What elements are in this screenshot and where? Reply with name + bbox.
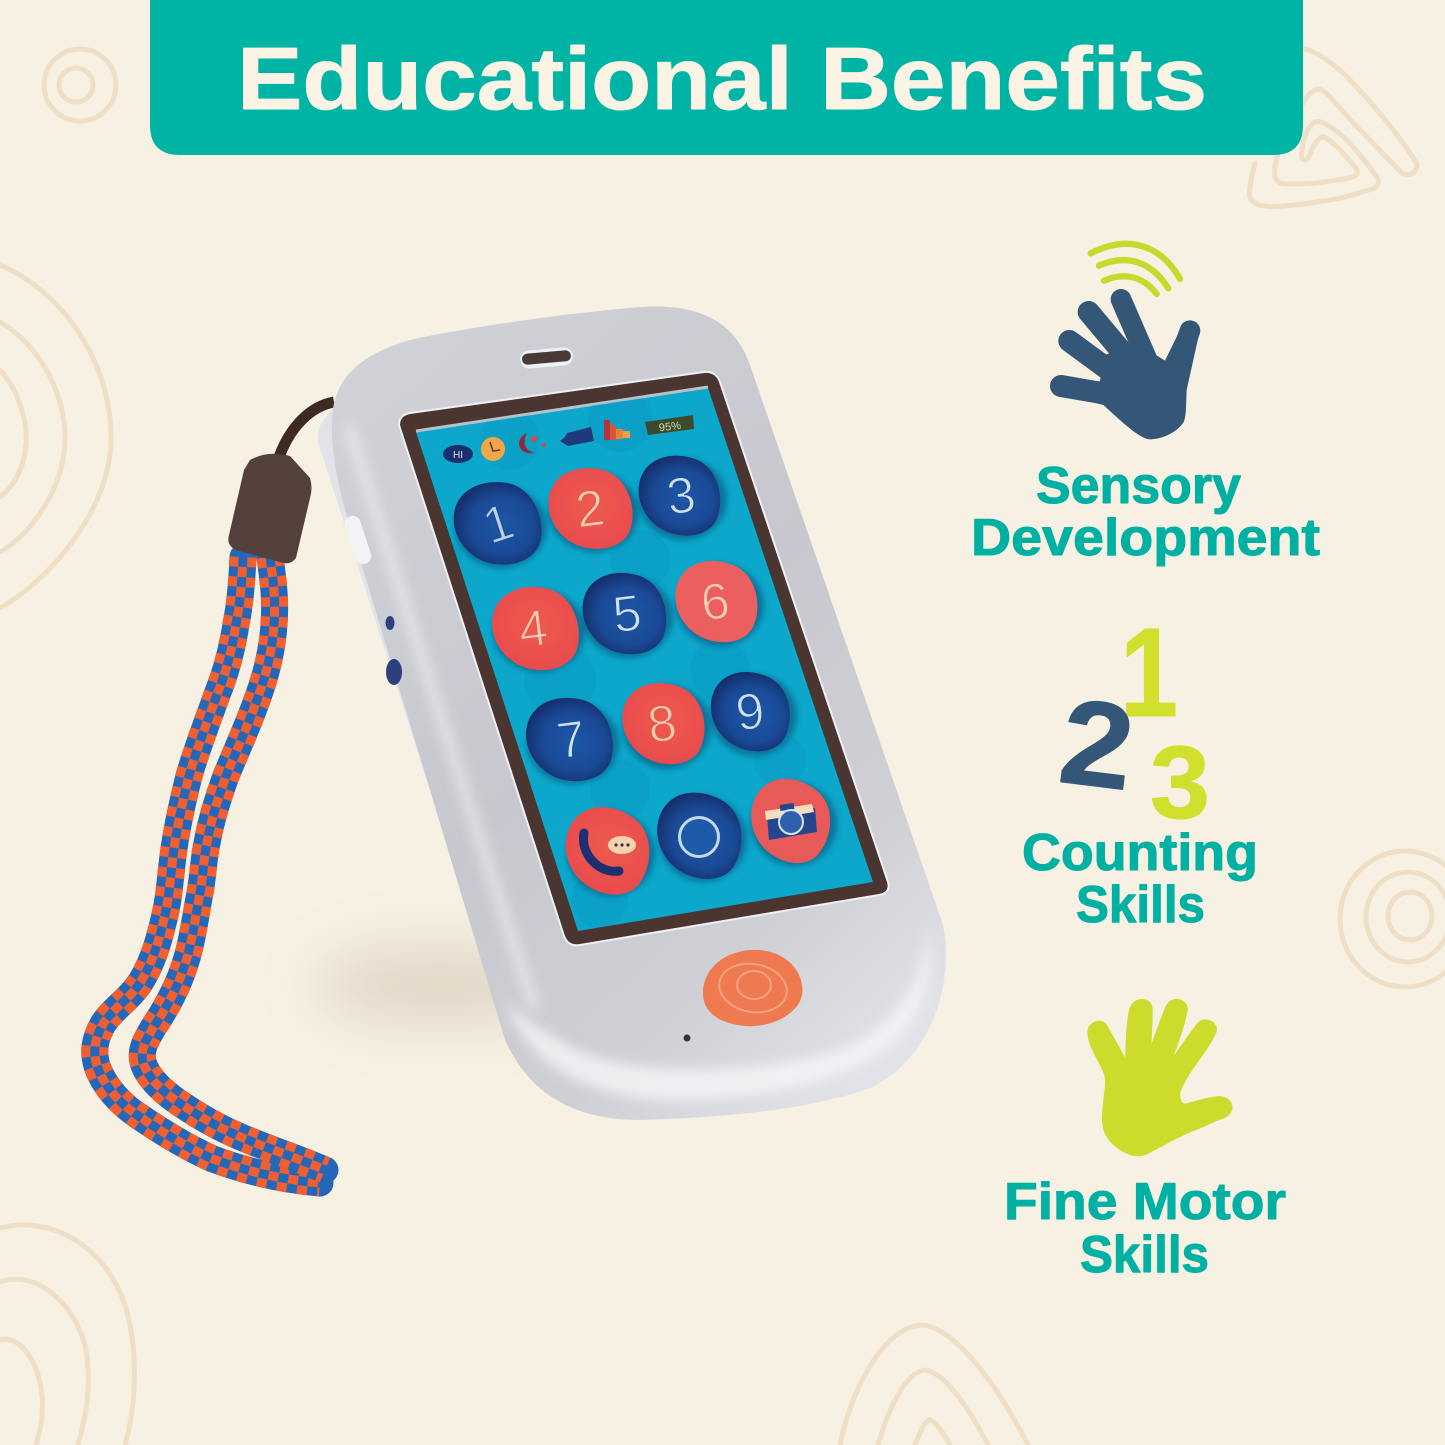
phone ground shadow [315, 945, 565, 1025]
phone bevel highlight [348, 425, 535, 1010]
strap cord [278, 402, 334, 460]
icon: envelope [560, 427, 594, 446]
icon: numbers 2 1 3: 1 [1120, 602, 1178, 743]
icon: battery [645, 415, 694, 435]
phone body [332, 306, 946, 1120]
key camera [733, 763, 849, 877]
key call [548, 791, 668, 909]
label: sensory development [971, 457, 1320, 567]
screen top reflection [416, 387, 708, 431]
benefit: counting skills [1022, 602, 1258, 934]
icon: signal bars [604, 420, 630, 440]
benefit: fine motor skills [1004, 1000, 1286, 1284]
icon: HI bubble [443, 445, 473, 463]
label: counting skills: Counting [1022, 824, 1258, 882]
key 9: 9 [733, 681, 768, 742]
key 2: 2 [573, 478, 608, 539]
key shadows [455, 458, 837, 896]
status icons [443, 415, 694, 463]
home button [703, 950, 802, 1026]
speaker slot [519, 347, 574, 369]
strap toggle [228, 454, 312, 563]
icon: numbers 2 1 3 [1053, 602, 1210, 840]
phone side strip [318, 410, 560, 1070]
icon: HI bubble: HI [453, 450, 463, 461]
key 6 [662, 548, 772, 654]
icon: phone handset [583, 833, 619, 871]
key 8 [609, 670, 719, 776]
screen bubbles [452, 398, 644, 928]
key 6: 6 [698, 571, 733, 632]
key 5: 5 [610, 583, 645, 644]
icon: camera [765, 803, 817, 840]
strap strand [142, 557, 325, 1170]
icon: clock [481, 437, 505, 461]
microphone hole [684, 1034, 690, 1042]
title: Educational Benefits [237, 29, 1207, 128]
label: counting skills [1022, 824, 1258, 934]
icon: numbers 2 1 3: 3 [1150, 725, 1210, 840]
screen frame [399, 372, 889, 945]
key 1: 1 [476, 492, 520, 555]
benefit: sensory development [971, 244, 1320, 567]
key 7 [516, 688, 624, 790]
label: counting skills: Skills [1076, 876, 1205, 934]
label: fine motor skills: Fine Motor [1004, 1173, 1286, 1231]
key 9 [697, 659, 805, 763]
label: sensory development: Development [971, 509, 1320, 567]
strap strand [95, 557, 320, 1183]
key 5 [571, 562, 679, 664]
key 4: 4 [516, 598, 551, 659]
key 3 [626, 444, 734, 546]
icon: numbers 2 1 3: 2 [1053, 672, 1141, 816]
key 0 [640, 777, 760, 893]
label: fine motor skills: Skills [1080, 1226, 1209, 1284]
icon: speech bubble [608, 836, 636, 854]
key 4 [482, 577, 590, 679]
key 1 [447, 475, 549, 571]
label: sensory development: Sensory [1036, 457, 1241, 515]
screen [416, 388, 873, 931]
key 3: 3 [664, 465, 699, 526]
key 8: 8 [645, 693, 680, 754]
title banner [150, 0, 1303, 155]
wrist strap [95, 557, 325, 1183]
keypad [447, 444, 849, 909]
phone side buttons [343, 514, 402, 685]
phone [318, 306, 946, 1120]
key 7: 7 [554, 709, 589, 770]
icon: lime hand [1088, 1000, 1232, 1155]
phone bottom highlight [505, 925, 930, 1100]
icon: moon and stars [519, 433, 546, 453]
icon: battery: 95% [658, 420, 682, 434]
key 2 [539, 458, 643, 558]
icon: sound waves [1091, 244, 1180, 294]
label: fine motor skills [1004, 1173, 1286, 1284]
icon: waving hand [1061, 244, 1200, 439]
